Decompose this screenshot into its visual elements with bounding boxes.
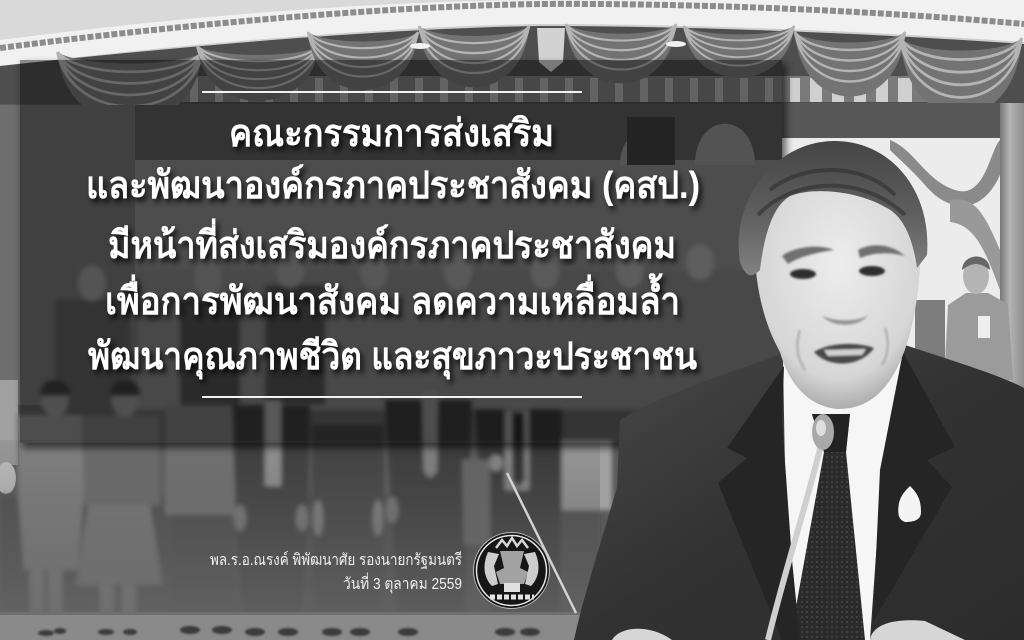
main statement text: และพัฒนาองค์กรภาคประชาสังคม (คสป.) — [86, 164, 700, 207]
lower inscription band — [490, 594, 534, 600]
pale left column — [0, 380, 18, 465]
white flowers — [0, 462, 16, 494]
tie — [790, 414, 865, 640]
facial features — [782, 245, 905, 370]
left eye — [790, 269, 816, 279]
base — [504, 583, 520, 592]
main statement text: พัฒนาคุณภาพชีวิต และสุขภาวะประชาชน — [88, 336, 697, 380]
main statement text: คณะกรรมการส่งเสริม — [229, 113, 554, 155]
haze over lower photo — [0, 440, 600, 615]
mouth — [814, 344, 874, 364]
hair — [739, 141, 927, 275]
top rule — [202, 91, 582, 93]
bright banner right of panel — [782, 138, 1002, 398]
main statement text — [86, 113, 700, 380]
foreground speaker — [574, 141, 1024, 640]
caption: speaker and date: พล.ร.อ.ณรงค์ พิพัฒนาศัย รองนายกรัฐมนตรี — [210, 550, 462, 569]
caption: speaker and date: วันที่ 3 ตุลาคม 2559 — [343, 572, 462, 594]
microphone — [768, 414, 834, 640]
face — [756, 175, 920, 409]
right hand — [870, 620, 965, 640]
right eye — [859, 266, 885, 276]
nose — [822, 315, 868, 325]
left lapel — [718, 366, 800, 640]
right lion — [524, 552, 538, 586]
person in white shirt at edge — [562, 440, 612, 510]
curtain swags — [58, 24, 1022, 123]
caption: speaker and date — [210, 550, 462, 594]
woman in patterned dress — [76, 379, 162, 633]
left eyebrow — [782, 247, 834, 264]
main statement text: มีหน้าที่ส่งเสริมองค์กรภาคประชาสังคม — [108, 218, 676, 267]
main statement text: เพื่อการพัฒนาสังคม ลดความเหลื่อมล้ำ — [105, 273, 680, 323]
left hand — [612, 629, 672, 640]
man in dark jacket — [232, 400, 310, 628]
back row of people — [55, 244, 785, 420]
man in grey shirt — [165, 405, 237, 627]
centre curtain ornament — [537, 28, 565, 72]
woman in dark dress — [312, 425, 384, 625]
wall between people — [0, 495, 600, 615]
shirt — [783, 358, 902, 640]
bottom rule — [202, 396, 582, 398]
front row of people — [0, 379, 612, 633]
woman in uniform — [16, 379, 85, 632]
right eyebrow — [858, 245, 905, 258]
pleated curtain panel — [180, 76, 930, 102]
sponsor backdrop behind panel — [135, 117, 785, 300]
government seal icon — [474, 532, 550, 608]
patterned figure beside officer — [915, 300, 945, 360]
man with white cane — [462, 410, 562, 628]
shoes on floor — [38, 626, 540, 636]
stage lights — [410, 41, 686, 49]
ceiling arch — [0, 0, 1024, 70]
white cane — [507, 473, 576, 613]
urn — [496, 551, 528, 584]
pillar at the right edge — [1000, 103, 1024, 393]
background officer — [944, 256, 1013, 382]
dark upper stage wall — [135, 105, 1024, 165]
teeth — [824, 349, 866, 356]
right lapel — [873, 352, 955, 622]
suit jacket — [574, 345, 1024, 640]
stage backdrop behind curtains — [0, 26, 1024, 104]
floor strip — [0, 612, 600, 640]
upper stage band at the right — [782, 103, 1024, 140]
crown flames — [496, 538, 528, 548]
left drape — [0, 105, 135, 405]
dark text panel — [20, 60, 786, 448]
left lion — [485, 552, 499, 586]
lapel pin — [898, 486, 921, 522]
cheek lines — [797, 328, 888, 370]
man with light tie — [385, 390, 472, 628]
